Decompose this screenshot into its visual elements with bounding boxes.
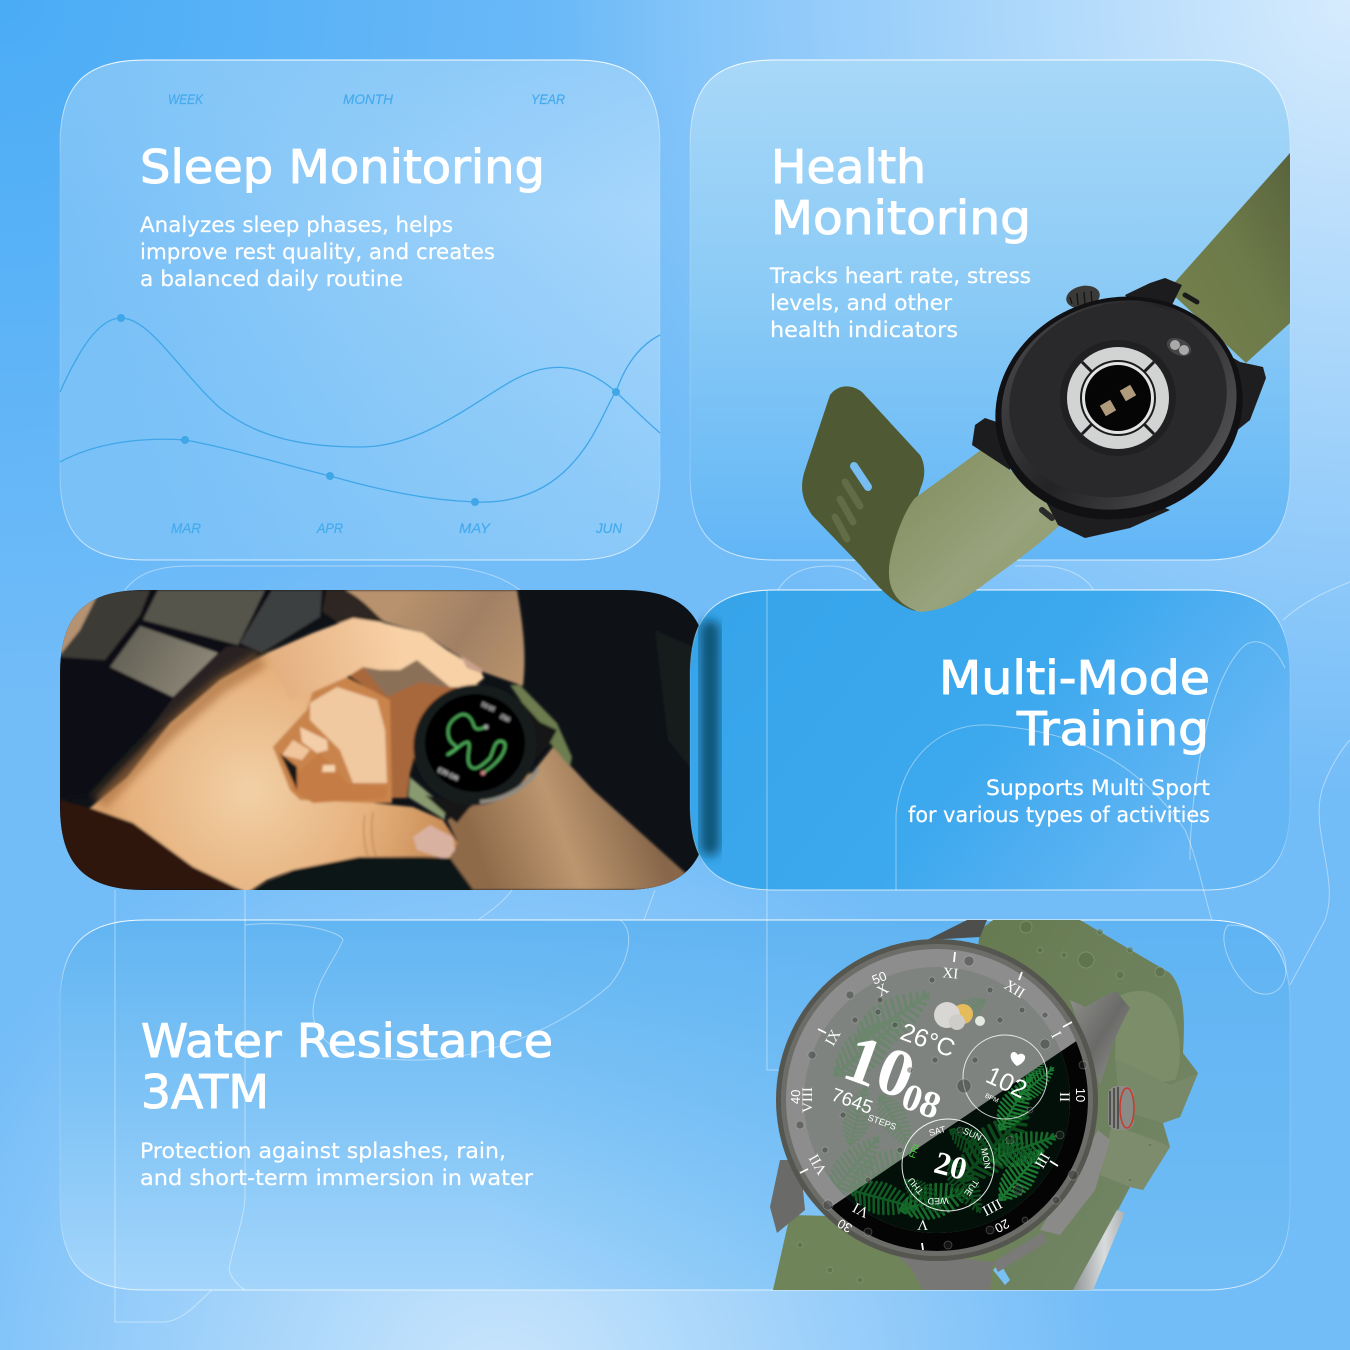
text block: health description [769, 264, 1031, 343]
small sensors [1166, 338, 1192, 356]
lower strap light side [889, 447, 1065, 612]
curled fingers [280, 687, 387, 803]
date dial: SUN [962, 1126, 983, 1143]
heading: health monitoring: Monitoring [771, 191, 1031, 245]
text block: health description: levels, and other [770, 291, 952, 316]
chart tabs: week month year: YEAR [531, 92, 565, 107]
strap loop slots [835, 466, 868, 539]
bezel [780, 940, 1100, 1300]
chart tabs: week month year: WEEK [168, 92, 204, 107]
thumb and nails [364, 655, 483, 860]
date dial: THU [906, 1176, 925, 1196]
crown [1066, 286, 1100, 308]
text block: sleep description [140, 213, 495, 292]
text block: sleep description: a balanced daily routine [140, 267, 403, 292]
hour numerals: X [874, 981, 892, 1000]
chart axis: months [171, 521, 622, 536]
line chart: sleep curves [60, 314, 660, 506]
text block: water description [140, 1139, 533, 1191]
text block: sleep description: Analyzes sleep phases, helps [140, 213, 453, 238]
panel: health monitoring [690, 60, 1290, 560]
dark reflection strip [700, 620, 720, 856]
heading: multi-mode training [939, 651, 1210, 756]
strap [773, 920, 1198, 1290]
watch case [972, 278, 1266, 538]
chart tabs: week month year [168, 92, 565, 107]
chart axis: months: APR [316, 521, 343, 536]
hour numerals: IX [823, 1027, 845, 1049]
dial face with ferns [800, 960, 1100, 1300]
hour numerals: VI [850, 1199, 872, 1220]
text block: sleep description: improve rest quality, and creates [140, 240, 495, 265]
bezel numbers and ticks: 50 [870, 968, 889, 987]
floor tiles [60, 590, 700, 800]
heading: health monitoring: Health [771, 140, 926, 194]
dark sleeve at bottom [250, 857, 473, 892]
route on watch screen [447, 714, 505, 773]
contour lines above photo row [125, 566, 1095, 592]
hand [88, 651, 460, 890]
icon: waterproof smartwatch [770, 920, 1198, 1300]
hour numerals: VIII [800, 1087, 816, 1113]
panel: sleep monitoring [60, 60, 660, 560]
buckle [1073, 1210, 1125, 1290]
upper strap [1168, 153, 1290, 363]
case [770, 920, 1130, 1290]
time and weather readout: 08 [896, 1075, 946, 1128]
date dial: FRI [907, 1142, 921, 1159]
bezel numbers and ticks: 30 [835, 1216, 855, 1236]
heading: water resistance [141, 1014, 553, 1119]
bezel numbers and ticks [788, 952, 1088, 1250]
chart axis: months: JUN [595, 521, 622, 536]
time and weather readout: STEPS [866, 1112, 898, 1132]
lower dark half with ferns [800, 1000, 1100, 1300]
filler behind curled fingers [273, 677, 392, 803]
side button [993, 1232, 1047, 1272]
panel: multi-mode training [690, 590, 1290, 890]
icon: watch back with olive strap [802, 153, 1290, 612]
hour numerals: XI [942, 965, 959, 983]
text block: water description: Protection against splashes, rain, [140, 1139, 506, 1164]
heading: multi-mode training: Multi-Mode [939, 651, 1210, 705]
bezel numbers and ticks: 40 [788, 1089, 803, 1104]
date dial: SAT [928, 1124, 947, 1138]
bezel numbers and ticks: 10 [1073, 1088, 1088, 1102]
soft shaded hand edge [100, 660, 262, 803]
heading: water resistance: 3ATM [141, 1065, 269, 1119]
upper forearm [323, 590, 524, 686]
heading: sleep monitoring: Sleep Monitoring [140, 140, 545, 194]
chart axis: months: MAR [171, 521, 201, 536]
shadow at bottom left [60, 800, 240, 890]
chart tabs: week month year: MONTH [343, 92, 393, 107]
time and weather readout: 10 [835, 1019, 925, 1114]
heart rate gauge: BPM [984, 1092, 999, 1105]
date dial: MON [979, 1147, 993, 1170]
time and weather readout: 7645 [828, 1085, 875, 1119]
heading: water resistance: Water Resistance [141, 1014, 553, 1068]
text block: training description: Supports Multi Sport [986, 776, 1210, 801]
index finger highlight [267, 618, 484, 700]
text block: health description: Tracks heart rate, stress [769, 264, 1031, 289]
shadowed wrist behind fingers [348, 666, 484, 800]
lower forearm [447, 747, 690, 890]
heart rate gauge: 102 [982, 1061, 1031, 1104]
weather icon [934, 1002, 985, 1030]
hour numerals [800, 965, 1072, 1232]
text block: water description: and short-term immersion in water [140, 1166, 533, 1191]
text block: health description: health indicators [770, 318, 958, 343]
heading: multi-mode training: Training [1016, 702, 1209, 756]
wrist watch [406, 683, 574, 824]
hour numerals: I [1047, 1029, 1064, 1041]
bezel numbers and ticks: 20 [992, 1216, 1012, 1236]
hour numerals: II [1056, 1092, 1072, 1102]
text block: training description: for various types of activities [908, 803, 1210, 828]
sensor ring [1060, 340, 1176, 456]
contour lines across lower panels [115, 582, 1350, 1322]
time and weather readout [828, 1002, 985, 1132]
hour numerals: III [1031, 1150, 1052, 1170]
date dial: WED [927, 1196, 949, 1206]
panel: water resistance [60, 920, 1290, 1290]
date dial: TUE [962, 1177, 981, 1198]
water droplets [796, 956, 1087, 1249]
strap droplets [797, 921, 1165, 1283]
upper ferns [817, 977, 990, 1206]
text block: training description [908, 776, 1210, 828]
wrist watch: 052 [499, 712, 511, 722]
photo: hand checking watch [60, 590, 708, 893]
heading: health monitoring [771, 140, 1031, 245]
wrist watch: 10:01 [480, 700, 497, 712]
heart rate gauge [963, 1035, 1047, 1119]
date dial [902, 1119, 994, 1211]
hour numerals: XII [1001, 977, 1027, 1002]
flap of lower strap [802, 386, 924, 611]
wrist watch: M3 6£3 [437, 765, 460, 781]
crown [1108, 1086, 1134, 1130]
hour numerals: IIII [979, 1195, 1004, 1218]
date dial: 20 [931, 1144, 971, 1187]
time and weather readout: 26°C [897, 1018, 959, 1063]
hour numerals: VII [806, 1151, 831, 1177]
hour numerals: V [917, 1216, 929, 1232]
chart axis: months: MAY [459, 521, 491, 536]
